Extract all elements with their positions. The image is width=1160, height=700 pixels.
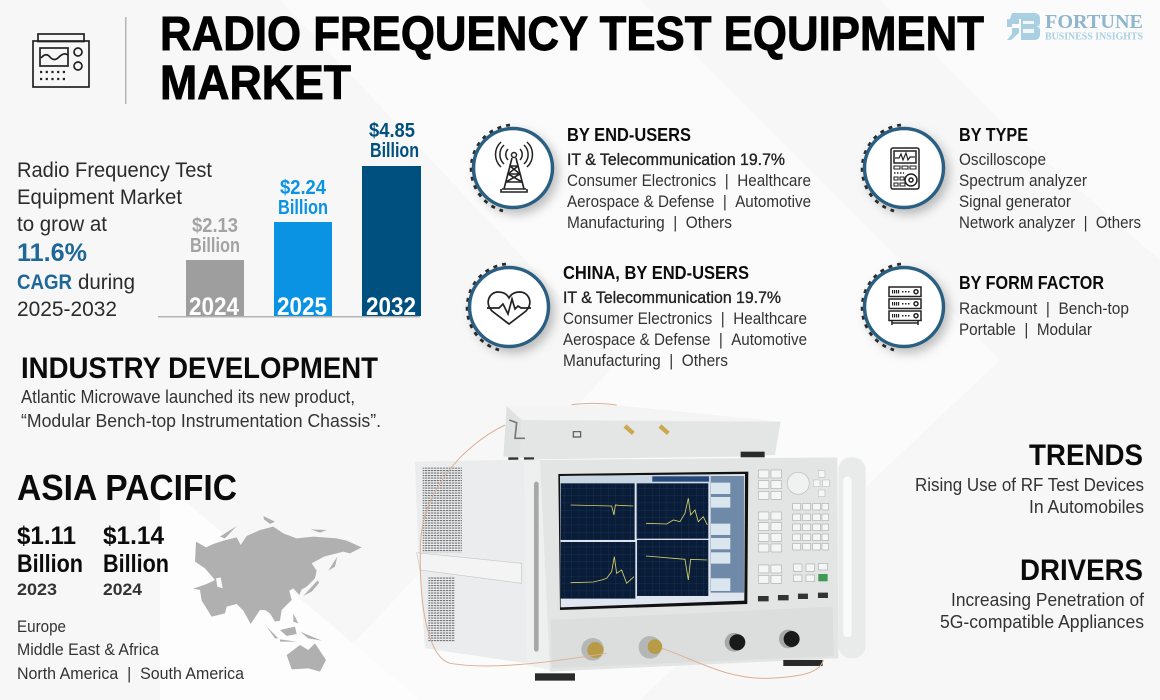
panel: by type: BY TYPE [959,125,1028,145]
panel: Asia Pacific: Billion [103,550,169,578]
panel: industry development: “Modular Bench-top Instrumentation Chassis”. [21,411,381,431]
panel: by end-users: Aerospace & Defense | Automotive [567,192,811,211]
icon: server rack badge [862,264,944,350]
panel: by end-users: BY END-USERS [567,125,691,145]
panel: Asia Pacific: North America | South America [17,664,245,683]
icon: tower badge [471,125,552,211]
bar chart: market size: Billion [370,140,419,162]
panel: industry development: INDUSTRY DEVELOPMENT [21,352,378,385]
panel: trends: TRENDS [1029,439,1143,472]
text: market growth summary: 2025-2032 [17,298,117,321]
panel: China by end-users: IT & Telecommunication 19.7% [563,289,781,307]
logo: Fortune Business Insights: FORTUNE [1045,11,1143,33]
panel: China by end-users: Consumer Electronics | Healthcare [563,309,807,328]
icon: RF instrument [33,34,89,87]
bar chart: market size: 2024 [189,293,239,321]
panel: Asia Pacific: $1.14 [103,522,164,550]
panel: China by end-users: Manufacturing | Others [563,351,728,370]
bar chart: market size: $4.85 [369,120,415,142]
title: RADIO FREQUENCY TEST EQUIPMENT [160,8,984,61]
panel: Asia Pacific: Europe [17,617,66,636]
bar chart: market size: Billion [278,197,328,219]
bar chart: market size: 2032 [366,293,416,321]
map: Asia Pacific [193,516,362,672]
panel: Asia Pacific: Billion [17,550,83,578]
panel: by type: Network analyzer | Others [959,213,1141,232]
bar chart: market size: $2.24 [280,177,327,199]
panel: by form factor: BY FORM FACTOR [959,273,1104,293]
bar chart: market size: $2.13 [192,215,238,237]
panel: Asia Pacific: 2024 [103,580,143,599]
panel: drivers: DRIVERS [1020,554,1143,587]
icon: heart badge [467,264,548,350]
panel: Asia Pacific: 2023 [17,580,57,599]
panel: by form factor [959,273,1129,339]
icon: oscilloscope badge [862,125,944,211]
bar chart: market size: 2025 [277,293,327,321]
panel: trends: In Automobiles [1029,497,1144,517]
text: market growth summary: Radio Frequency Test [17,159,212,182]
panel: by form factor: Portable | Modular [959,320,1092,339]
panel: Asia Pacific [17,467,245,683]
panel: China by end-users: CHINA, BY END-USERS [563,263,749,283]
panel: drivers [940,554,1145,632]
panel: drivers: 5G-compatible Appliances [940,612,1144,632]
panel: by end-users [567,125,811,232]
logo: Fortune Business Insights: BUSINESS INSIGHTS [1045,32,1143,42]
panel: by type [959,125,1141,232]
text: market growth summary [17,159,212,321]
text: market growth summary: during [78,271,135,294]
image: RF test instrument [415,403,866,681]
panel: trends [915,439,1144,517]
text: market growth summary: to grow at [17,213,107,236]
panel: industry development [21,352,381,431]
panel: China by end-users [563,263,807,370]
panel: Asia Pacific: ASIA PACIFIC [17,467,237,508]
panel: by type: Oscilloscope [959,150,1046,169]
panel: trends: Rising Use of RF Test Devices [915,475,1144,495]
panel: by end-users: Manufacturing | Others [567,213,732,232]
panel: Asia Pacific: $1.11 [17,522,76,550]
panel: by form factor: Rackmount | Bench-top [959,299,1129,318]
panel: China by end-users: Aerospace & Defense | Automotive [563,330,807,349]
logo: Fortune Business Insights [1007,11,1143,42]
text: market growth summary: CAGR [17,271,72,294]
panel: by end-users: Consumer Electronics | Healthcare [567,171,811,190]
panel: Asia Pacific: Middle East & Africa [17,640,160,659]
panel: by end-users: IT & Telecommunication 19.7% [567,151,785,169]
bar chart: market size: Billion [190,235,240,257]
bar chart: market size [158,120,421,321]
panel: industry development: Atlantic Microwave launched its new product, [21,387,355,407]
title [160,8,984,110]
panel: drivers: Increasing Penetration of [951,590,1145,610]
panel: by type: Spectrum analyzer [959,171,1087,190]
title: MARKET [160,57,351,110]
text: market growth summary: 11.6% [17,239,87,267]
panel: by type: Signal generator [959,192,1071,211]
text: market growth summary: Equipment Market [17,186,182,209]
